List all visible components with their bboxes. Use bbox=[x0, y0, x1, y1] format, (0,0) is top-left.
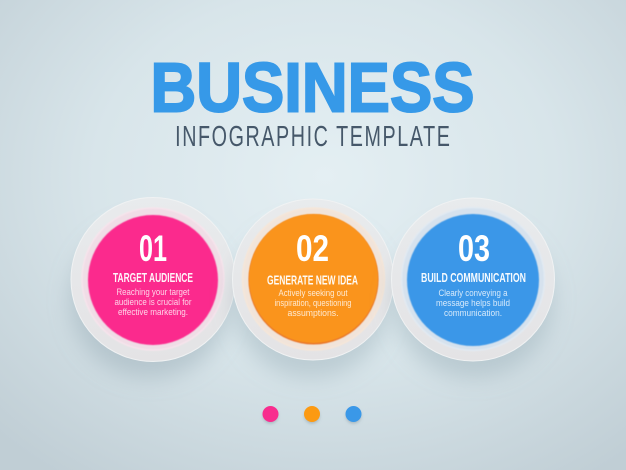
step heading: BUILD COMMUNICATION bbox=[421, 271, 526, 285]
step description bbox=[274, 288, 352, 318]
step heading: TARGET AUDIENCE bbox=[113, 271, 193, 285]
pagination dots bbox=[262, 406, 362, 424]
orange disc bbox=[249, 214, 378, 343]
step description: effective marketing. bbox=[118, 307, 188, 317]
blue dot bbox=[346, 406, 362, 422]
ring shadow bbox=[233, 222, 389, 378]
step description: Clearly conveying a bbox=[438, 288, 508, 298]
subtitle: INFOGRAPHIC TEMPLATE bbox=[175, 121, 450, 153]
blue disc bbox=[407, 214, 539, 346]
step description: message helps build bbox=[436, 298, 510, 308]
pink dot bbox=[262, 406, 278, 422]
step description: Actively seeking out bbox=[278, 288, 348, 298]
step description: audience is crucial for bbox=[114, 297, 192, 307]
title: BUSINESS bbox=[150, 48, 474, 126]
inner ring tint bbox=[402, 208, 544, 350]
outer ring bbox=[232, 199, 394, 360]
dot shadows bbox=[263, 408, 361, 424]
panel: step 3 build communication bbox=[392, 198, 554, 378]
step number: 01 bbox=[139, 228, 167, 269]
orange disc edge bbox=[248, 214, 378, 344]
inner ring tint bbox=[82, 208, 224, 350]
panel: step 1 target audience bbox=[70, 198, 235, 378]
pink disc bbox=[88, 215, 218, 345]
step description: assumptions. bbox=[288, 308, 338, 318]
step number: 03 bbox=[458, 228, 490, 269]
step description: communication. bbox=[444, 308, 502, 318]
step description bbox=[436, 288, 510, 318]
outer ring bbox=[71, 198, 235, 362]
step description bbox=[114, 287, 192, 317]
step heading: GENERATE NEW IDEA bbox=[267, 274, 358, 288]
step number: 02 bbox=[296, 228, 329, 269]
ring shadow bbox=[70, 222, 230, 378]
outer ring bbox=[392, 198, 554, 361]
inner ring tint bbox=[242, 208, 384, 350]
ring shadow bbox=[393, 222, 553, 378]
orange dot bbox=[304, 406, 320, 422]
panel: step 2 generate new idea bbox=[232, 199, 394, 378]
step description: Reaching your target bbox=[116, 287, 190, 297]
step description: inspiration, questioning bbox=[274, 298, 352, 308]
